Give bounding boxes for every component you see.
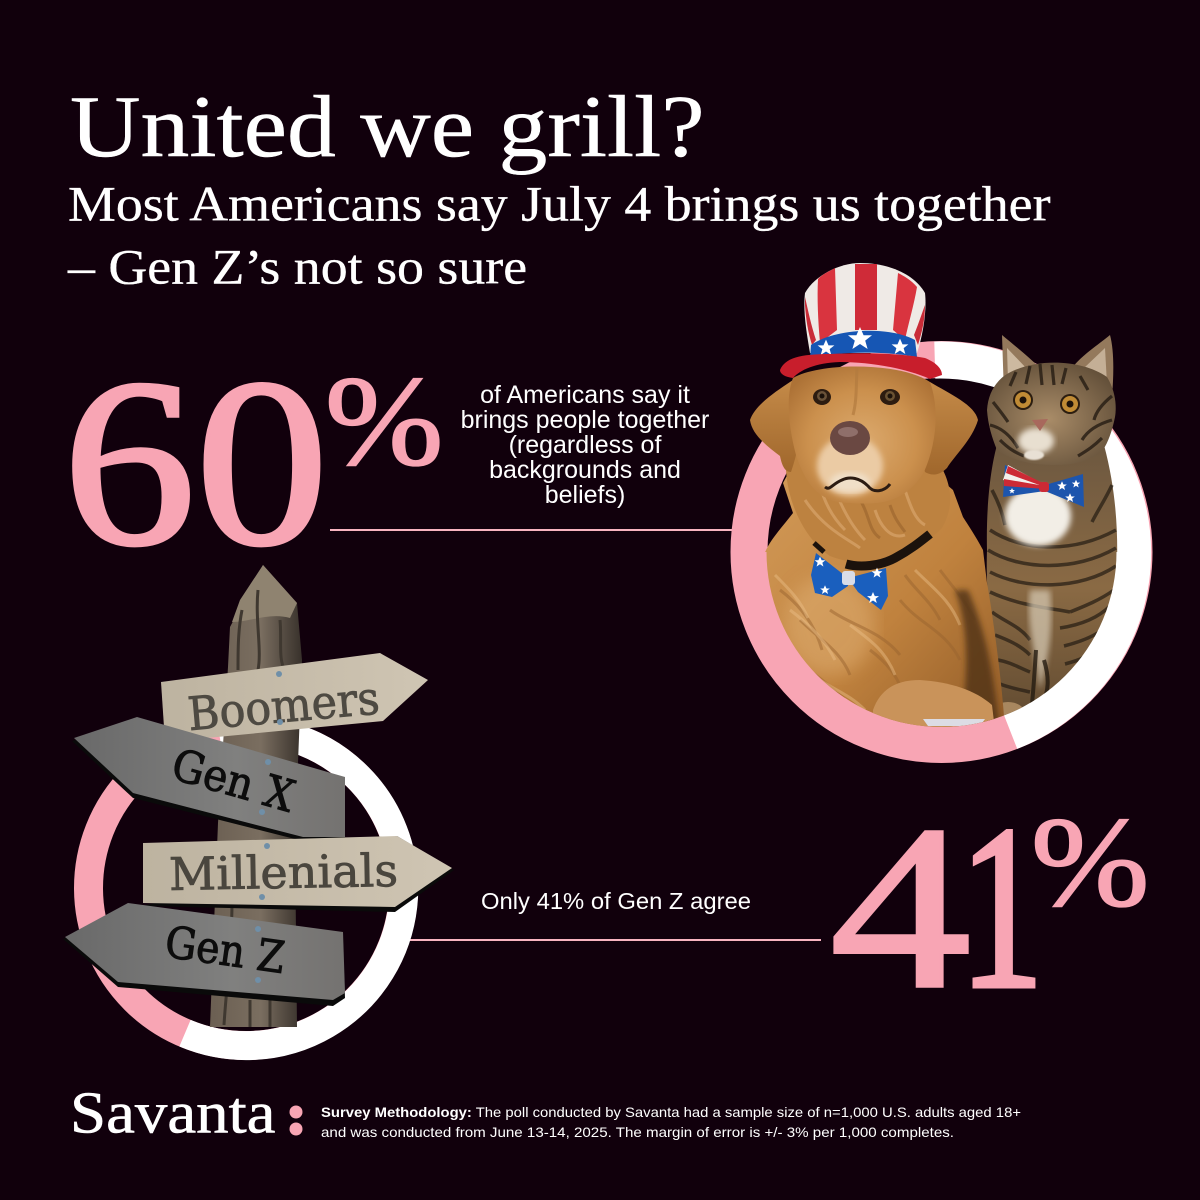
donut chart: 60 percent [749, 360, 1134, 744]
sign: Millenials [143, 836, 454, 912]
dog [750, 366, 1005, 733]
statistic: 60 percent [63, 330, 443, 595]
survey methodology note [321, 1105, 1021, 1140]
dog muzzle [817, 436, 883, 496]
donut chart: 41 percent [88, 730, 404, 1046]
text: 60 percent description: beliefs) [545, 481, 625, 509]
statistic: 41 percent [830, 778, 1149, 1038]
dog nose [830, 421, 870, 455]
survey methodology note: Survey Methodology: The poll conducted by Savanta had a sample size of n=1,000 U.S. adults aged 18+ [321, 1105, 1021, 1120]
subtitle [67, 177, 1051, 295]
subtitle: – Gen Z’s not so sure [67, 240, 527, 295]
leader line 60 [330, 529, 735, 531]
text: 60 percent description: backgrounds and [489, 456, 681, 484]
cat [987, 335, 1117, 730]
dog bowtie [811, 553, 848, 597]
sign: Gen Z: Gen Z [162, 917, 288, 984]
cat eyes [1013, 390, 1033, 410]
sign: Gen X [72, 717, 345, 841]
dog paw [873, 680, 995, 730]
cat ears [1002, 335, 1036, 376]
leader line 41 [410, 939, 821, 941]
cat belly [1029, 590, 1051, 690]
dog ears [750, 380, 796, 472]
uncle sam hat [780, 263, 942, 379]
dog eyes [813, 389, 831, 405]
text: 41 percent description: Only 41% of Gen Z agree [481, 888, 751, 914]
subtitle: Most Americans say July 4 brings us together [68, 177, 1051, 232]
dog collar [846, 534, 930, 566]
sign: Millenials: Millenials [169, 844, 398, 901]
sign: Boomers [161, 653, 428, 742]
statistic: 60 percent: % [325, 351, 443, 492]
illustration: cat and dog in patriotic outfits [750, 263, 1117, 733]
text: 60 percent description: brings people together [461, 406, 709, 434]
statistic: 41 percent: % [1031, 792, 1149, 933]
sign: Gen Z [63, 903, 345, 1006]
text: 60 percent description: of Americans say it [480, 381, 690, 409]
title: United we grill? [70, 78, 705, 176]
cat bowtie [1003, 465, 1045, 497]
statistic: 60 percent: 60 [63, 330, 328, 595]
logo: Savanta: Savanta [70, 1081, 275, 1146]
text: 60 percent description: (regardless of [509, 431, 661, 459]
sign: Gen X: Gen X [166, 739, 301, 823]
dog head [789, 366, 936, 504]
statistic: 41 percent: 4 [830, 778, 971, 1037]
sign: Boomers: Boomers [186, 671, 382, 741]
dog mane [786, 455, 949, 562]
survey methodology note: and was conducted from June 13-14, 2025. The margin of error is +/- 3% per 1,000 completes. [321, 1125, 954, 1140]
cat chest [1005, 486, 1071, 546]
post [210, 565, 302, 1027]
cat head [987, 363, 1116, 465]
text: 60 percent description [461, 381, 709, 509]
illustration: signpost with generations [63, 565, 454, 1027]
statistic: 41 percent: 1 [960, 778, 1044, 1038]
